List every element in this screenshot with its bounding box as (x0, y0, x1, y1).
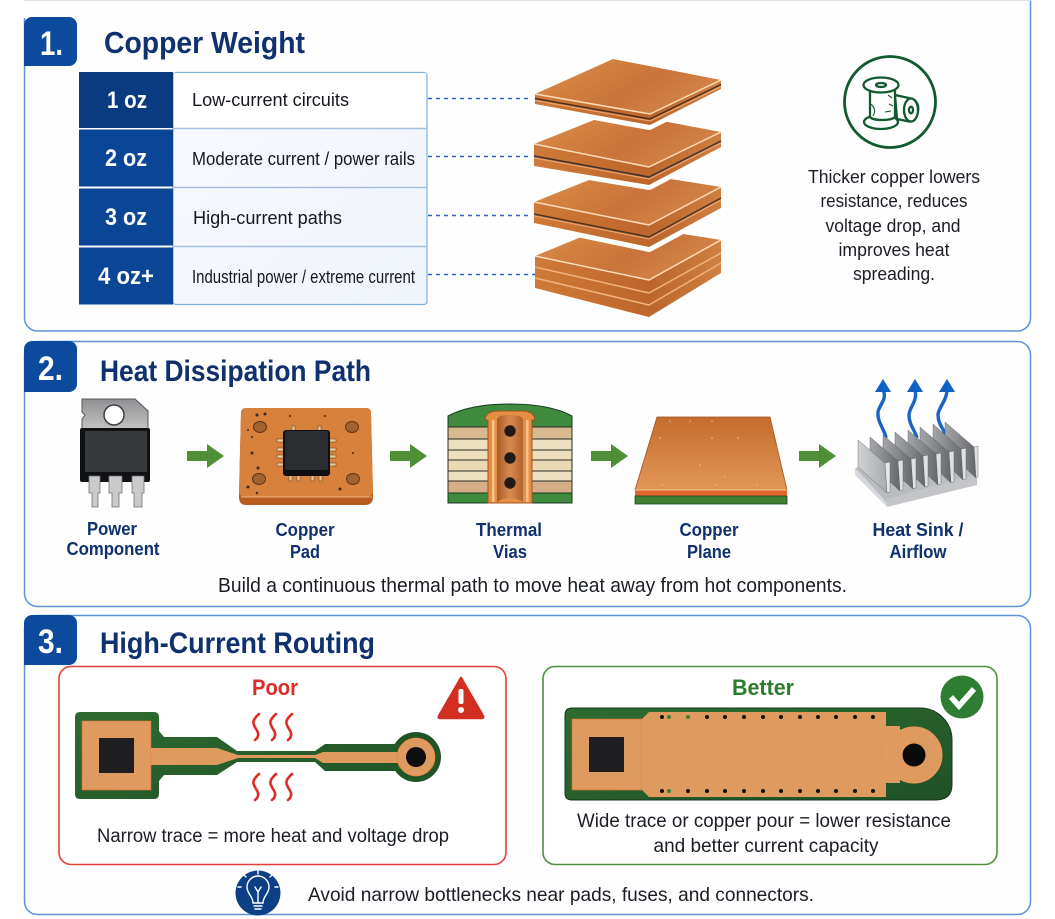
badge: section 1 (24, 17, 77, 66)
text: copper note: Thicker copper lowers (808, 167, 980, 187)
arrow (390, 444, 427, 468)
label: power component (66, 519, 160, 559)
badge: section 3: 3. (38, 623, 63, 661)
icon: power component (80, 399, 150, 507)
wide trace board (565, 708, 952, 800)
row: 2 oz (79, 130, 415, 186)
narrow trace board (75, 712, 441, 799)
icon: copper pad (239, 408, 373, 505)
text: better note: Wide trace or copper pour = lower resistance (577, 811, 951, 832)
table: copper weights (79, 72, 427, 304)
stack: 2 oz (534, 112, 721, 185)
row: 1 oz: Low-current circuits (192, 90, 349, 110)
label: copper plane: Copper (680, 520, 738, 540)
text: better note (577, 811, 951, 857)
text: poor note: Narrow trace = more heat and voltage drop (97, 826, 449, 847)
label: copper pad: Pad (290, 542, 320, 562)
text: routing tip: Avoid narrow bottlenecks near pads, fuses, and connectors. (308, 884, 814, 906)
badge: section 2: 2. (38, 350, 63, 388)
row: 2 oz: 2 oz (105, 145, 147, 172)
label: thermal vias: Thermal (476, 520, 542, 540)
icon: heat squiggles (253, 714, 292, 800)
label: power component: Power (87, 519, 137, 539)
icon: lightbulb (236, 870, 280, 916)
label: better: Better (732, 675, 794, 700)
label: copper plane: Plane (687, 542, 731, 562)
row: 1 oz (79, 72, 349, 128)
label: thermal vias: Vias (493, 542, 527, 562)
label: copper plane (680, 520, 738, 562)
panel: heat dissipation path (24, 341, 1030, 606)
label: heat sink airflow (872, 520, 964, 562)
stack: 3 oz (534, 170, 721, 247)
panel: better routing (543, 666, 997, 864)
icon: copper plane (635, 417, 787, 504)
heading: copper weight: Copper Weight (104, 25, 305, 60)
row: 4 oz+: 4 oz+ (98, 263, 154, 290)
icon: copper spool (844, 56, 936, 148)
panel: high-current routing (24, 615, 1030, 916)
row: 2 oz: Moderate current / power rails (192, 149, 415, 169)
label: thermal vias (476, 520, 542, 562)
stack: 4 oz (535, 223, 721, 317)
arrow (799, 444, 836, 468)
panel: poor routing (59, 666, 506, 864)
text: better note: and better current capacity (654, 836, 879, 857)
row: 4 oz+ (79, 248, 415, 304)
heading: heat dissipation path: Heat Dissipation Path (100, 355, 371, 388)
label: power component: Component (66, 539, 160, 559)
heading: high-current routing: High-Current Routing (100, 627, 375, 660)
text: copper note: resistance, reduces (820, 191, 968, 211)
arrow (187, 444, 224, 468)
row: 3 oz: 3 oz (105, 204, 147, 231)
icon: warning (439, 678, 483, 718)
label: copper pad: Copper (276, 520, 334, 540)
label: heat sink airflow: Heat Sink / (872, 520, 964, 540)
row: 1 oz: 1 oz (107, 87, 147, 114)
text: copper note: improves heat (838, 240, 950, 260)
icon: check (940, 676, 984, 718)
text: copper note (808, 167, 980, 284)
badge: section 3 (24, 615, 77, 665)
label: heat sink airflow: Airflow (890, 542, 947, 562)
badge: section 2 (24, 341, 77, 392)
airflow arrows (875, 379, 955, 438)
badge: section 1: 1. (40, 25, 63, 63)
label: copper pad (276, 520, 334, 562)
icon: heat sink with airflow (855, 379, 978, 507)
leader lines (428, 98, 536, 274)
stack: 1 oz (535, 59, 721, 125)
row: 3 oz (79, 188, 342, 246)
row: 3 oz: High-current paths (193, 208, 342, 228)
text: copper note: voltage drop, and (826, 216, 960, 236)
label: poor: Poor (252, 675, 298, 700)
row: 4 oz+: Industrial power / extreme current (192, 267, 415, 287)
caption: thermal path: Build a continuous thermal path to move heat away from hot components. (218, 575, 847, 597)
fins (858, 422, 978, 493)
copper stacks (534, 59, 721, 317)
arrow (591, 444, 628, 468)
icon: thermal vias (448, 404, 572, 503)
heat sink base (855, 445, 977, 507)
text: copper note: spreading. (853, 264, 935, 284)
panel: copper weight (20, 0, 1031, 331)
